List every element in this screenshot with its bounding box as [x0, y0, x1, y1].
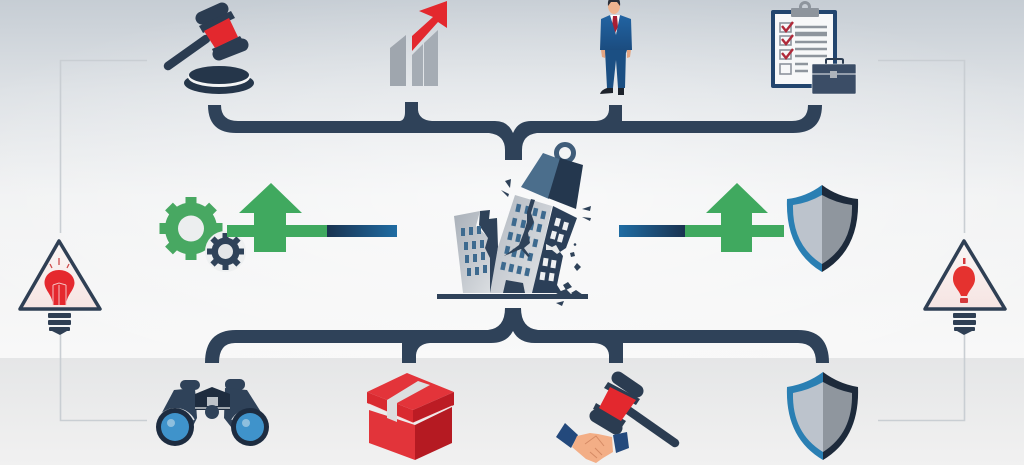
weight [521, 144, 583, 209]
icon: green gears [160, 197, 246, 272]
icon: handshake and gavel [556, 378, 675, 463]
icon: shield right [787, 185, 858, 272]
top connector bracket [208, 102, 822, 160]
icon: warning balloon bulb right [925, 241, 1005, 335]
left building [454, 210, 499, 293]
side frame lines [60, 60, 964, 420]
ground line [437, 294, 588, 299]
icon: shield bottom [787, 372, 858, 460]
icon: checklist clipboard with briefcase [771, 2, 856, 94]
icon: collapsing buildings under weight [437, 144, 591, 306]
icon: warning lightbulb left [20, 241, 100, 335]
debris and impact marks [501, 179, 591, 306]
arrow: right green up arrow with blue bar [619, 183, 784, 252]
icon: binoculars [156, 379, 269, 446]
right building [532, 206, 577, 293]
icon: businessman [600, 0, 632, 95]
arrow: left green up arrow with blue bar [227, 183, 397, 252]
middle building [490, 195, 552, 293]
icon: red box [367, 373, 454, 460]
icon: rising bar chart with red arrow [390, 1, 447, 86]
bottom connector bracket [205, 308, 829, 363]
icon: gavel on sound block [168, 9, 254, 94]
